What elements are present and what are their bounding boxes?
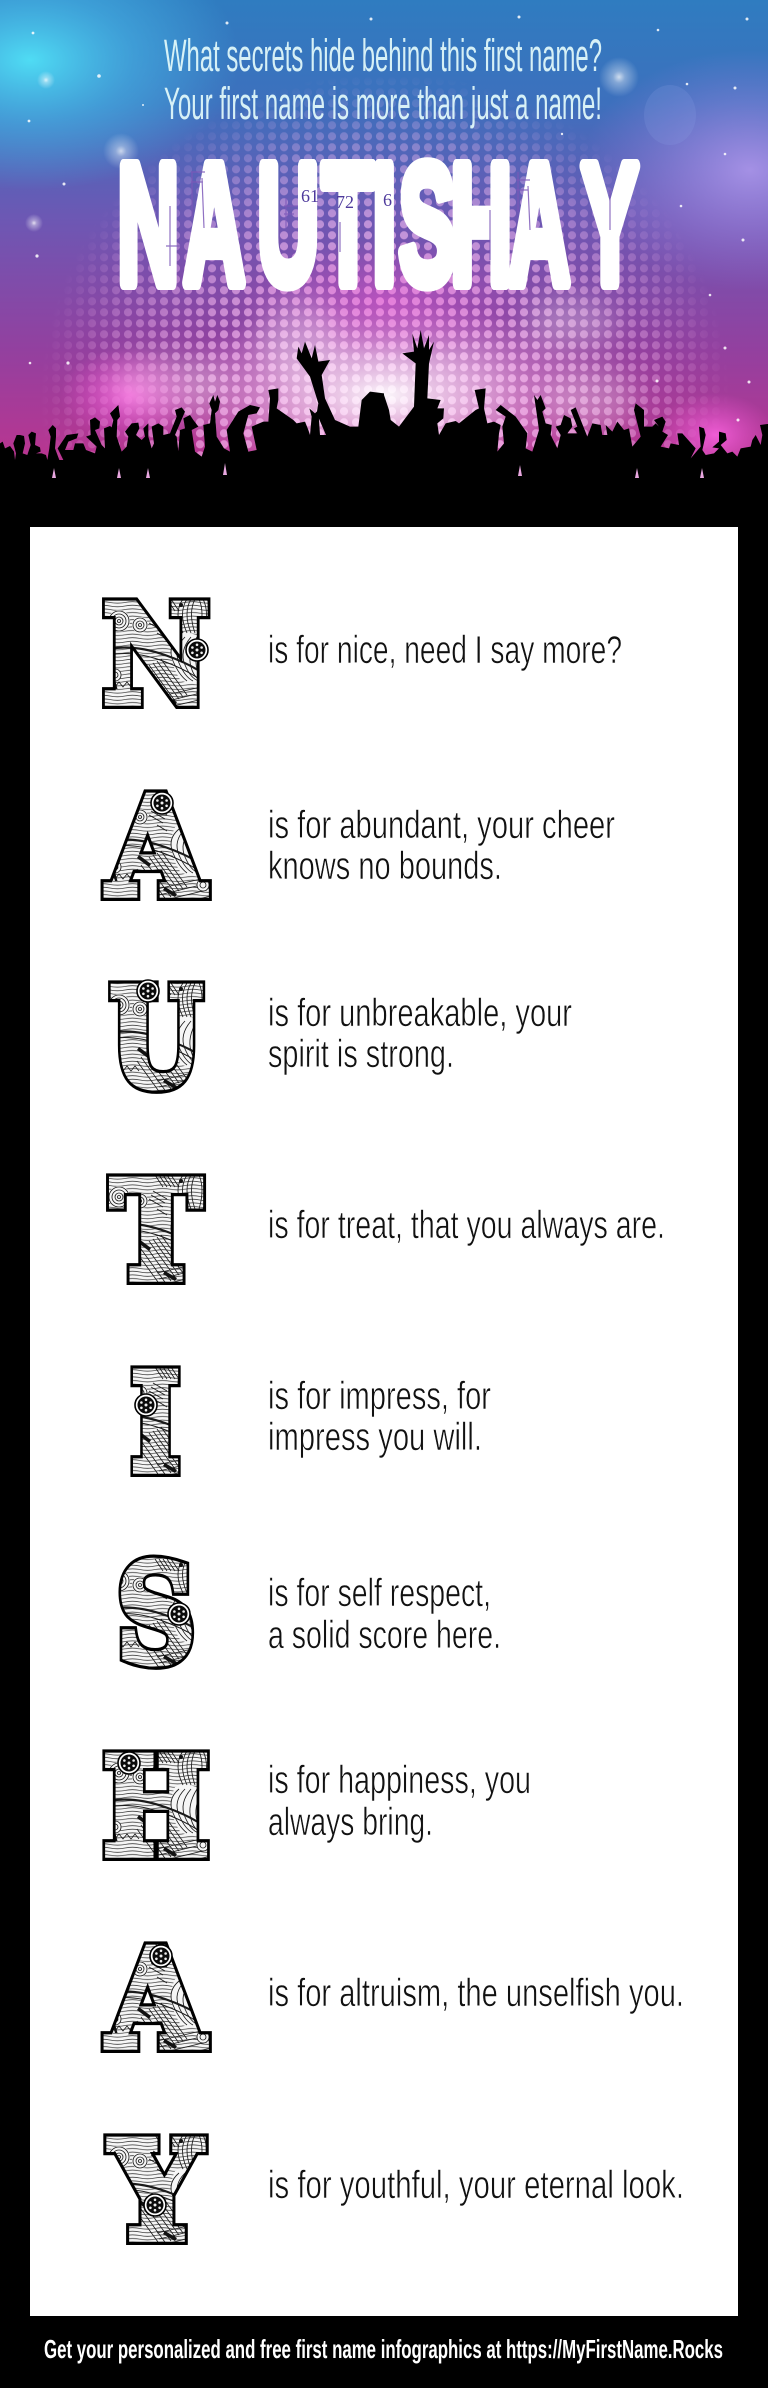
row: U: U bbox=[110, 959, 202, 1117]
row: S bbox=[117, 1535, 501, 1693]
sparkles bbox=[25, 16, 750, 422]
panel: white letter list bbox=[30, 527, 738, 2316]
row: S: S bbox=[117, 1535, 195, 1693]
row: A (second): A bbox=[106, 1920, 206, 2078]
row: I: is for impress, for bbox=[268, 1375, 491, 1418]
row: N: N bbox=[103, 576, 209, 734]
row: I: I bbox=[131, 1344, 180, 1502]
row: A: is for abundant, your cheer bbox=[268, 804, 615, 847]
row: T: T bbox=[111, 1152, 201, 1310]
heading: intro lines bbox=[164, 30, 602, 129]
title: NAUTISHAY: 6 bbox=[383, 190, 392, 210]
row: H: H bbox=[103, 1728, 209, 1886]
title: NAUTISHAY: 61 bbox=[301, 186, 319, 206]
row: Y bbox=[109, 2112, 684, 2270]
row: U bbox=[110, 959, 572, 1117]
title: NAUTISHAY: 72 bbox=[336, 192, 354, 212]
row: I: I bbox=[131, 1344, 180, 1502]
row: S: is for self respect, bbox=[268, 1572, 491, 1615]
row: A: A bbox=[106, 768, 206, 926]
row: Y: Y bbox=[109, 2112, 202, 2270]
title: NAUTISHAY: NAUTISHAY bbox=[118, 130, 638, 320]
row: N: N bbox=[103, 576, 209, 734]
row: A bbox=[106, 768, 615, 926]
row: I bbox=[131, 1344, 491, 1502]
crowd silhouette bbox=[0, 330, 768, 530]
row: S: S bbox=[117, 1535, 195, 1693]
row: I: impress you will. bbox=[268, 1416, 482, 1459]
row: A: A bbox=[106, 768, 206, 926]
row: Y: Y bbox=[109, 2112, 202, 2270]
row: H: is for happiness, you bbox=[268, 1759, 531, 1802]
row: U: U bbox=[110, 959, 202, 1117]
row: N: is for nice, need I say more? bbox=[268, 629, 622, 672]
row: A (second): A bbox=[106, 1920, 206, 2078]
row: T bbox=[111, 1152, 665, 1310]
row: S: a solid score here. bbox=[268, 1614, 501, 1657]
row: T: T bbox=[111, 1152, 201, 1310]
row: H: H bbox=[103, 1728, 209, 1886]
row: H bbox=[103, 1728, 531, 1886]
row: U: spirit is strong. bbox=[268, 1033, 454, 1076]
row: U: is for unbreakable, your bbox=[268, 992, 572, 1035]
row: A: knows no bounds. bbox=[268, 845, 502, 888]
row: A (second) bbox=[106, 1920, 684, 2078]
row: H: always bring. bbox=[268, 1801, 433, 1844]
row: N bbox=[103, 576, 622, 734]
hero background: concert lights bbox=[0, 0, 768, 460]
